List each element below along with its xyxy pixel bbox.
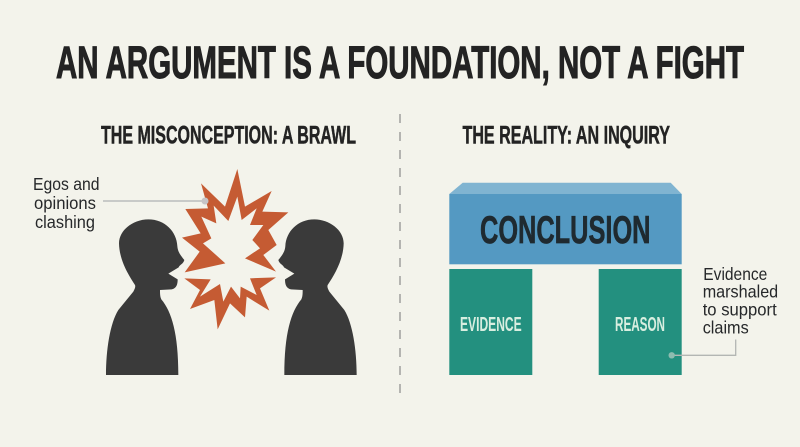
icon: right speaker silhouette [278,219,357,375]
callout: evidence marshaled [668,264,778,358]
conclusion block [449,183,682,264]
callout: evidence marshaled: marshaled [703,282,778,302]
evidence pillar [449,269,532,375]
panel: the misconception [33,122,357,375]
icon: left speaker silhouette [106,219,184,375]
callout: egos and opinions: opinions [34,193,96,213]
callout: egos and opinions: Egos and [33,174,100,194]
panel: the reality [449,122,778,375]
callout: egos and opinions [33,174,208,232]
callout: evidence marshaled: Evidence [703,264,767,284]
evidence pillar: EVIDENCE [460,314,522,336]
callout: egos and opinions: clashing [35,212,95,232]
callout: evidence marshaled: claims [703,317,749,337]
callout: evidence marshaled: to support [703,300,777,320]
reason pillar [599,269,682,375]
reason pillar: REASON [615,314,665,336]
heading: the reality: THE REALITY: AN INQUIRY [462,122,670,150]
heading: the misconception: THE MISCONCEPTION: A BRAWL [101,122,356,150]
icon: clash burst [182,169,288,329]
conclusion block: CONCLUSION [480,209,650,252]
